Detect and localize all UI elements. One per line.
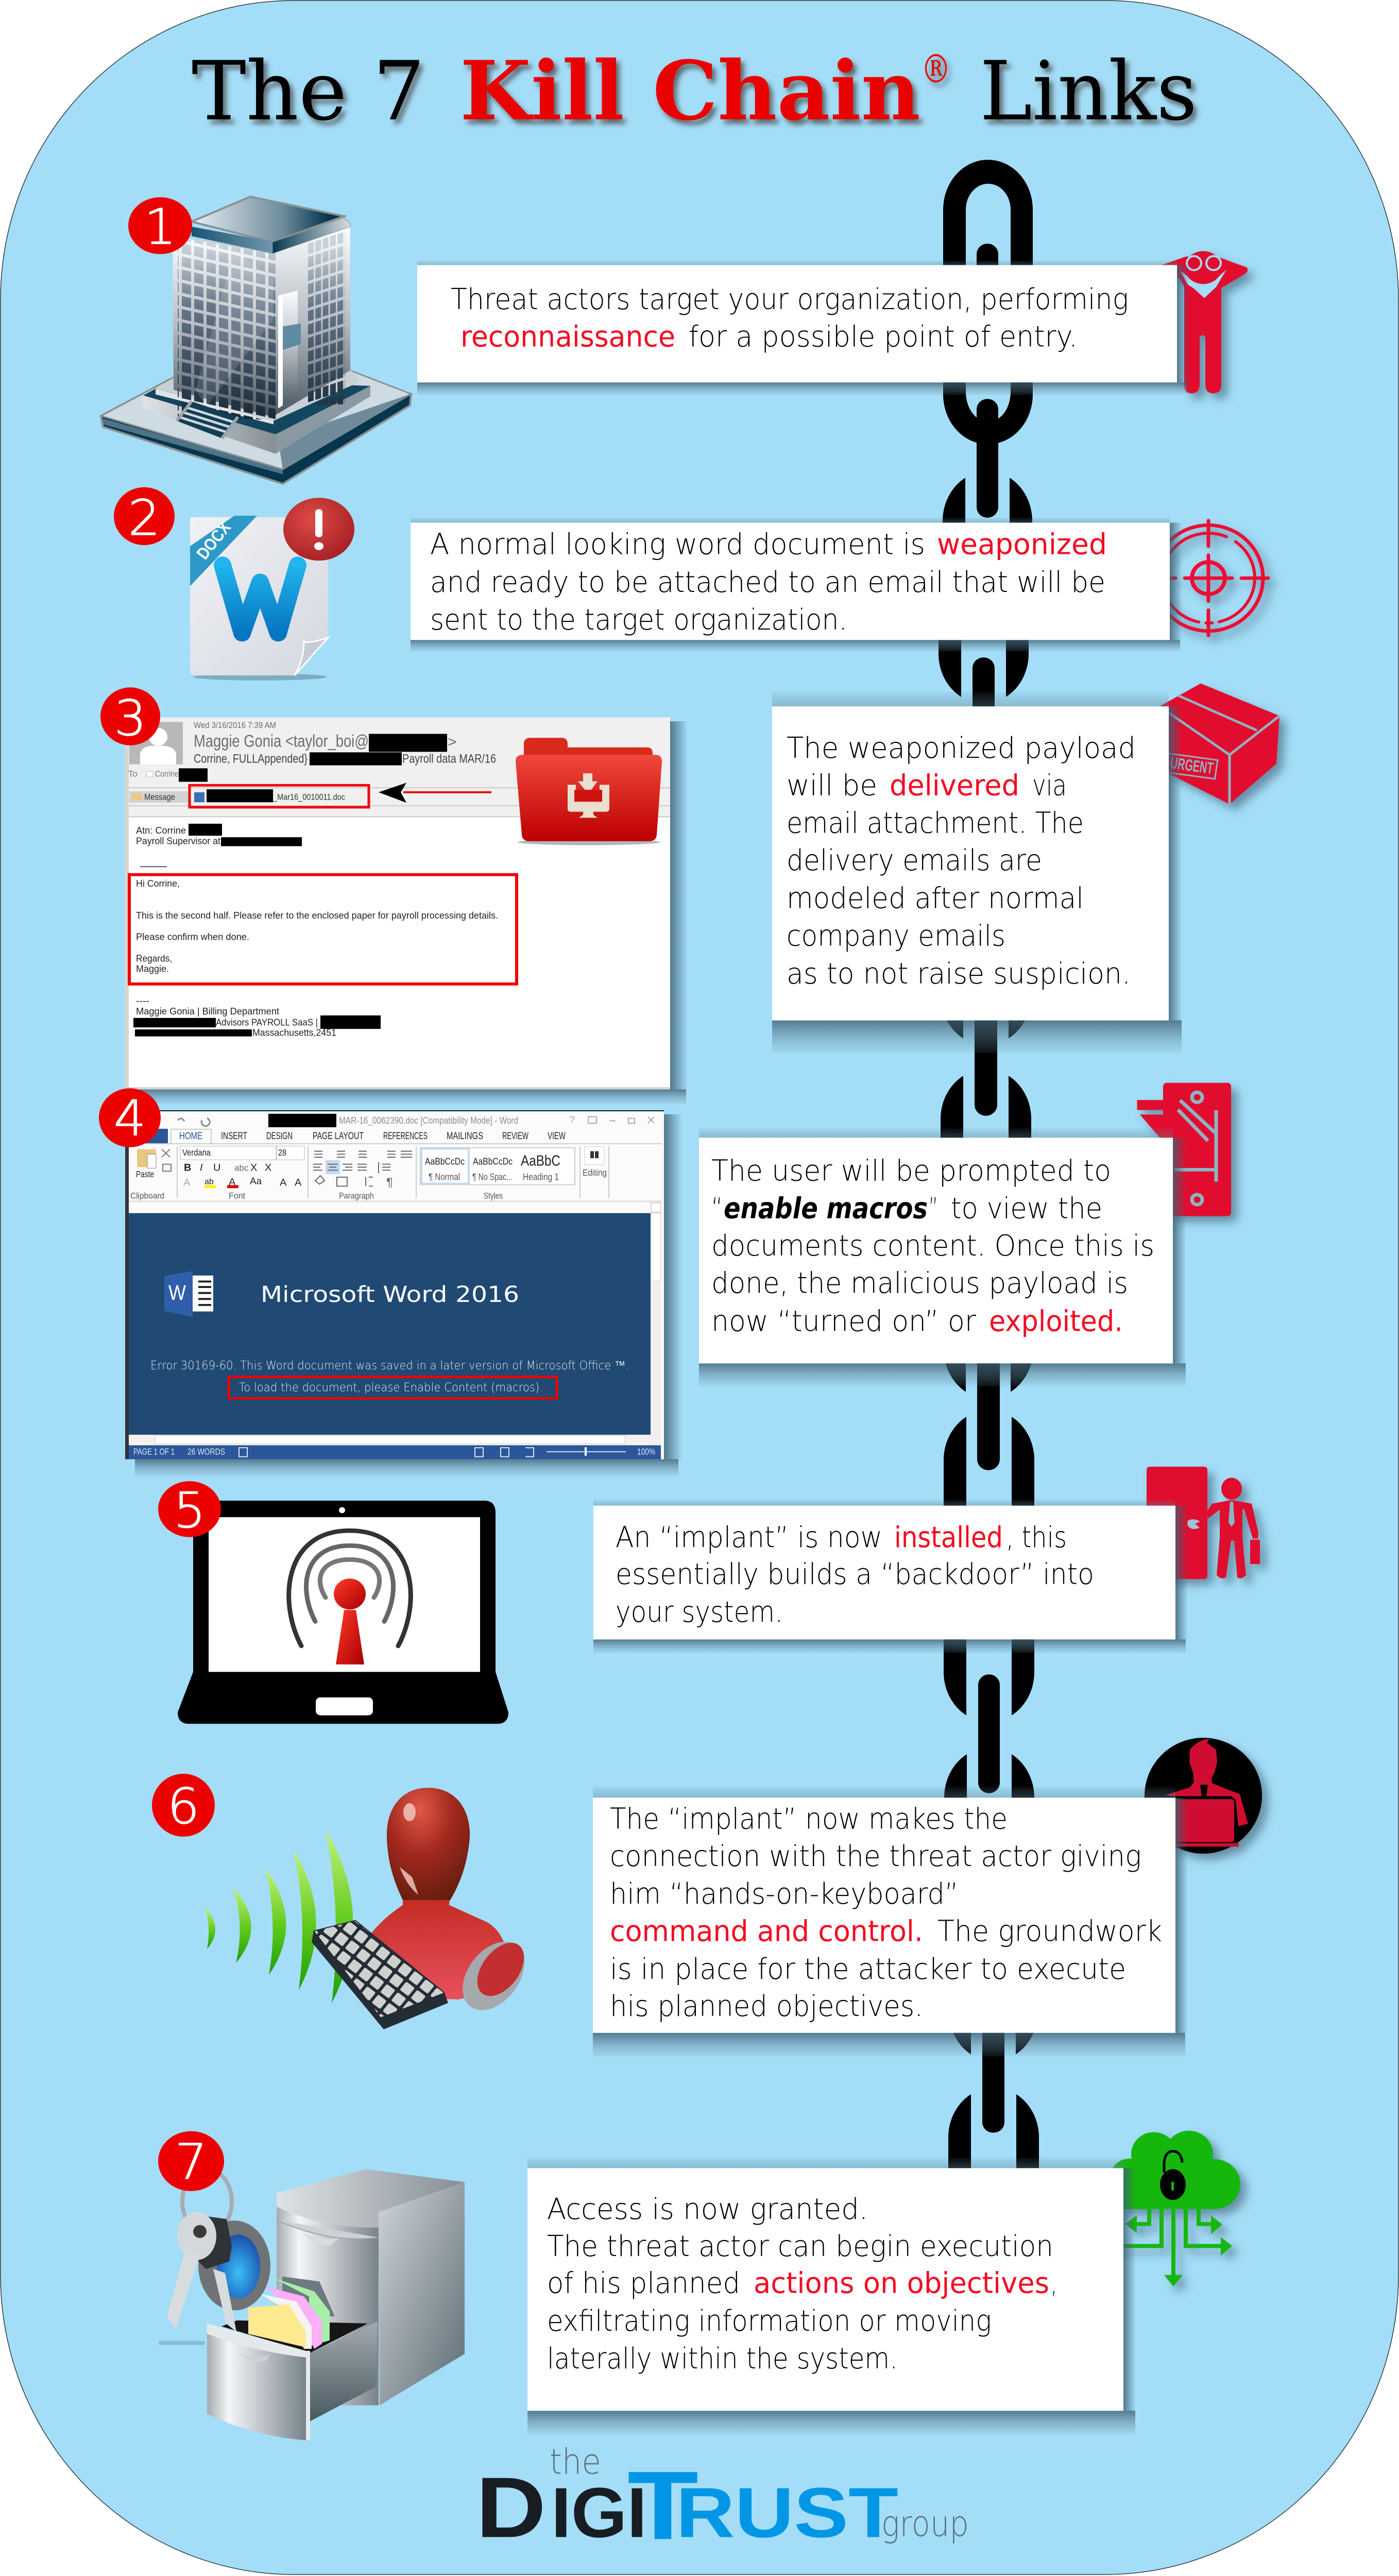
panel: email screenshot: ---- [136, 995, 149, 1006]
panel: word screenshot: AaBbC [521, 1153, 560, 1169]
panel: step 5 text: , this [1006, 1521, 1067, 1554]
panel: word screenshot: REFERENCES [383, 1131, 428, 1142]
icon: office building [101, 197, 411, 484]
panel: step 3 text: company emails [787, 919, 1005, 953]
panel: word screenshot: 26 WORDS [187, 1447, 225, 1457]
title: Kill Chain [460, 43, 920, 139]
arrow: pointing at attachment [379, 783, 491, 803]
panel: email screenshot: Please confirm when done. [136, 931, 249, 942]
panel: step 1 text [417, 261, 1189, 395]
panel: word screenshot: X [265, 1162, 271, 1173]
panel: step 7 text: The threat actor can begin execution [547, 2230, 1053, 2263]
panel: word screenshot: ? [569, 1115, 575, 1126]
panel: email screenshot: Maggie. [136, 963, 169, 974]
panel: email screenshot: Payroll data MAR/16 [402, 752, 496, 766]
panel: step 2 text: and ready to be attached to an email that will be [430, 566, 1105, 599]
panel: email screenshot: Wed 3/16/2016 7:39 AM [194, 720, 276, 730]
icon: man leaving through door [1147, 1467, 1260, 1579]
icon: green cloud with open lock [1107, 2131, 1240, 2286]
badge: number 1 [128, 197, 192, 256]
icon: word logo [164, 1271, 213, 1317]
panel: step 4 text: exploited. [989, 1304, 1123, 1338]
panel: word screenshot: 28 [278, 1147, 286, 1158]
panel: email screenshot: This is the second half. Please refer to the enclosed paper for payroll processing details. [136, 910, 498, 921]
panel: word screenshot: Heading 1 [523, 1172, 559, 1182]
panel: step 6 text [593, 1787, 1188, 2056]
panel: step 7 text: Access is now granted. [547, 2193, 868, 2226]
panel: word screenshot: abc [234, 1163, 248, 1173]
panel: word screenshot: A [280, 1177, 287, 1188]
panel: step 6 text: connection with the threat actor giving [610, 1840, 1141, 1873]
panel: email screenshot: Message [144, 792, 175, 802]
panel: step 4 text [699, 1128, 1186, 1386]
icon: file cabinet with keys [159, 2169, 465, 2440]
panel: word screenshot: Clipboard [130, 1191, 164, 1200]
panel: step 6 text: The “implant” now makes the [610, 1802, 1008, 1836]
panel: word screenshot: REVIEW [502, 1131, 528, 1142]
icon: hacker at laptop in black circle [1145, 1738, 1262, 1854]
icon: red download folder [516, 738, 662, 845]
panel: email screenshot: > [448, 734, 457, 751]
panel: email screenshot: Maggie Gonia | Billing Department [136, 1006, 280, 1016]
icon: red man with hands behind head [1162, 251, 1248, 394]
panel: step 5 text: An “implant” is now [616, 1521, 882, 1554]
panel: word screenshot: Paragraph [339, 1191, 374, 1200]
logo: the DigiTrust group: D [476, 2460, 546, 2555]
panel: word screenshot: MAILINGS [447, 1131, 483, 1142]
logo: the DigiTrust group: IGI [551, 2472, 647, 2552]
icon: laptop with signal [178, 1501, 508, 1724]
panel: word screenshot: DESIGN [266, 1131, 293, 1142]
panel: step 5 text [593, 1500, 1188, 1653]
panel: step 7 text: laterally within the system. [547, 2342, 898, 2376]
icon: signal waves [205, 1829, 353, 2003]
panel: step 7 text [527, 2158, 1136, 2435]
panel: word screenshot [125, 1110, 683, 1476]
panel: word screenshot: Styles [484, 1191, 503, 1200]
panel: word screenshot: I [200, 1162, 203, 1173]
panel: word screenshot: VIEW [548, 1131, 566, 1142]
panel: word screenshot: Aa [250, 1176, 262, 1186]
badge: number 1: 1 [144, 198, 176, 256]
panel: word screenshot: ab [204, 1178, 214, 1186]
panel: word screenshot: A [183, 1177, 191, 1188]
panel: step 3 text: modeled after normal [787, 882, 1084, 915]
icon: weaponized word document: DOCX [193, 518, 235, 563]
panel: step 5 text: installed [894, 1521, 1003, 1554]
panel: step 2 text [411, 518, 1182, 652]
chain [939, 160, 1039, 2177]
panel: word screenshot: PAGE LAYOUT [313, 1131, 364, 1142]
panel: step 3 text: delivered [890, 769, 1019, 802]
panel: step 6 text: him “hands-on-keyboard” [610, 1877, 959, 1911]
panel: step 7 text: exfiltrating information or moving [547, 2304, 992, 2338]
icon: urgent package: URGENT [1169, 754, 1215, 777]
panel: step 4 text: now “turned on” or [711, 1304, 976, 1338]
logo: the DigiTrust group: group [881, 2503, 969, 2545]
panel: step 3 text: email attachment. The [787, 806, 1084, 840]
panel: email screenshot: Massachusetts,2451 [252, 1027, 336, 1038]
panel: step 1 text: Threat actors target your organization, performing [451, 283, 1129, 316]
panel: word screenshot: INSERT [221, 1131, 247, 1142]
panel: word screenshot: A [229, 1177, 236, 1188]
panel: step 2 text: A normal looking word document is [430, 528, 925, 561]
icon: coloured folders in drawer [248, 2278, 330, 2349]
badge: number 7 [158, 2131, 224, 2191]
panel: step 6 text: his planned objectives. [610, 1990, 923, 2023]
panel: email screenshot: To [128, 769, 138, 779]
panel: word screenshot: Paste [136, 1169, 154, 1179]
panel: step 7 text: actions on objectives [754, 2266, 1049, 2300]
panel: word screenshot: A [295, 1177, 302, 1188]
panel: step 4 text: to view the [951, 1192, 1102, 1225]
icon: red switch [1137, 1083, 1231, 1216]
badge: number 2 [114, 487, 175, 546]
panel: word screenshot: ¶ No Spac... [472, 1172, 513, 1182]
panel: email screenshot: Corrine, FULLAppended} [194, 752, 308, 766]
icon: word logo: W [168, 1281, 186, 1304]
panel: email screenshot: Advisors PAYROLL SaaS | [216, 1017, 318, 1027]
badge: number 3: 3 [114, 689, 146, 747]
panel: step 3 text: The weaponized payload [787, 732, 1136, 765]
panel: step 3 text: via [1032, 769, 1067, 802]
panel: word screenshot: AaBbCcDc [425, 1156, 465, 1167]
title [192, 43, 1197, 139]
panel: step 3 text [772, 692, 1182, 1053]
icon: red target crosshair [1154, 521, 1268, 636]
badge: number 5: 5 [174, 1482, 206, 1539]
panel: step 7 text: of his planned [547, 2266, 740, 2300]
panel: word screenshot: To load the document, please Enable Content (macros). [239, 1380, 543, 1394]
panel: word screenshot: B [184, 1162, 191, 1173]
panel: step 3 text: as to not raise suspicion. [787, 957, 1131, 991]
panel: word screenshot: Font [229, 1191, 245, 1200]
panel: step 2 text: sent to the target organization. [430, 603, 847, 637]
panel: step 4 text: enable macros [724, 1192, 928, 1225]
panel: step 4 text: documents content. Once this is [711, 1229, 1154, 1263]
panel: step 5 text: your system. [616, 1596, 783, 1629]
panel: step 6 text: The groundwork [937, 1914, 1162, 1948]
title: ® [921, 47, 951, 92]
badge: number 5 [158, 1481, 221, 1539]
panel: email screenshot: Corrine [155, 769, 179, 779]
panel: email screenshot: Payroll Supervisor at [136, 836, 221, 846]
badge: number 2: 2 [128, 489, 160, 546]
panel: word screenshot: X [250, 1162, 257, 1173]
title: Links [980, 44, 1197, 139]
panel: word screenshot: U [213, 1162, 220, 1173]
panel: email screenshot: Maggie Gonia <taylor_boi@ [194, 732, 369, 751]
panel: word screenshot: MAR-16_0062390.doc [Compatibility Mode] - Word [339, 1115, 518, 1126]
panel: word screenshot: Error 30169-60. This Word document was saved in a later version of Microsoft Office ™. [150, 1358, 629, 1372]
panel: step 7 text: , [1051, 2266, 1057, 2300]
panel: word screenshot: ¶ [386, 1176, 393, 1189]
icon: urgent package [1159, 684, 1279, 804]
panel: step 1 text: reconnaissance [460, 320, 675, 353]
badge: number 4: 4 [114, 1090, 146, 1147]
logo: the DigiTrust group [476, 2442, 969, 2560]
panel: step 6 text: is in place for the attacker to execute [610, 1953, 1126, 1986]
panel: word screenshot: AaBbCcDc [473, 1156, 513, 1167]
badge: number 3 [100, 687, 160, 747]
panel: word screenshot: Microsoft Word 2016 [261, 1282, 519, 1308]
panel: step 4 text: “ [711, 1192, 723, 1225]
panel: step 3 text: will be [787, 769, 877, 802]
panel: word screenshot: Editing [583, 1167, 607, 1178]
panel: step 5 text: essentially builds a “backdoor” into [616, 1557, 1094, 1591]
panel: email screenshot: Atn: Corrine [136, 825, 186, 836]
panel: step 4 text: ” [929, 1192, 938, 1225]
panel: email screenshot: Regards, [136, 953, 172, 963]
logo: the DigiTrust group: T [627, 2451, 698, 2560]
icon: weaponized word document [190, 498, 354, 681]
panel: email screenshot: Hi Corrine, [136, 878, 180, 889]
title: The 7 [192, 44, 425, 139]
panel: word screenshot: ¶ Normal [429, 1172, 460, 1182]
panel: step 6 text: command and control. [610, 1914, 923, 1948]
panel: word screenshot: PAGE 1 OF 1 [133, 1447, 175, 1457]
badge: number 4 [99, 1088, 161, 1147]
panel: email screenshot [125, 717, 688, 1104]
icon: signal arcs and antenna [289, 1531, 411, 1665]
panel: step 4 text: The user will be prompted to [711, 1154, 1111, 1188]
badge: number 6 [152, 1774, 215, 1837]
panel: step 1 text: for a possible point of entry. [689, 320, 1078, 353]
panel: word screenshot: HOME [179, 1131, 202, 1142]
icon: red person with keyboard, mouse and signal [205, 1788, 537, 2029]
panel: email screenshot: _Mar16_0010011.doc [272, 792, 345, 802]
badge: number 6: 6 [167, 1777, 199, 1835]
panel: step 4 text: done, the malicious payload is [711, 1267, 1128, 1300]
panel: word screenshot: Verdana [182, 1147, 211, 1158]
panel: step 3 text: delivery emails are [787, 844, 1042, 877]
badge: number 7: 7 [175, 2133, 207, 2190]
panel: step 2 text: weaponized [937, 528, 1107, 561]
logo: the DigiTrust group: RUST [676, 2472, 898, 2552]
panel: word screenshot: 100% [637, 1447, 655, 1457]
logo: the DigiTrust group: the [550, 2442, 601, 2482]
